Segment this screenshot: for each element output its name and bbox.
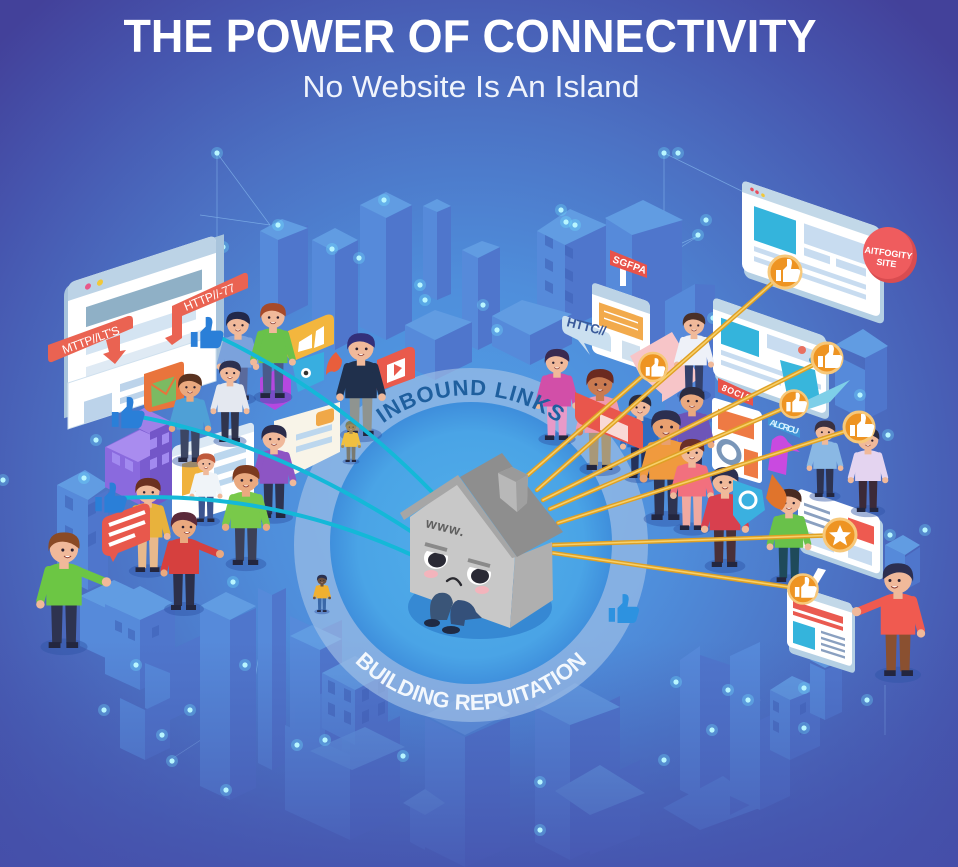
- glowing network nodes: [0, 147, 931, 836]
- person: jeans behind panel: [189, 453, 223, 526]
- magenta figure: [768, 435, 800, 475]
- authority site badge: [863, 227, 917, 283]
- pink bubble: [630, 332, 700, 402]
- browser panel: large left: [64, 232, 224, 430]
- cyan app icon: [292, 352, 324, 392]
- browser panel: mid left: [274, 402, 340, 481]
- red label: 8OCIA: [720, 383, 752, 403]
- red signboard: [575, 392, 643, 450]
- browser panel: top right: [742, 180, 884, 325]
- city bottom: [0, 535, 958, 867]
- chimney: [498, 467, 528, 512]
- HTTC bubble: [562, 314, 611, 355]
- browser panel: lower left: [172, 422, 254, 527]
- red link flag 2: [165, 273, 248, 345]
- people: right group: [535, 313, 925, 683]
- person: red hoodie woman: [160, 512, 224, 616]
- eyes: [423, 542, 492, 585]
- orange figure icon: [326, 352, 342, 375]
- badge 5: [844, 412, 874, 442]
- thumb 1: [191, 317, 224, 348]
- gold chat icon: [287, 315, 334, 360]
- person: orange man: [640, 410, 692, 527]
- person: purple jacket woman: [252, 425, 296, 524]
- red link flag 1: [48, 316, 133, 364]
- cyan box with flowers: [780, 346, 850, 412]
- legs: [424, 593, 482, 634]
- house roof: [400, 453, 563, 558]
- email icon: [144, 362, 184, 412]
- curved label: inbound links: INBOUND LINKS: [376, 380, 564, 422]
- thumb 3: [95, 482, 127, 513]
- blue thumbs left: [95, 317, 224, 513]
- authority site badge: AITFOGITY: [864, 245, 913, 261]
- browser panel: second right: [713, 297, 829, 421]
- curved label: building reputation: BUILDING REPUITATION: [356, 652, 586, 710]
- right bottom panel: [787, 583, 855, 674]
- sign post: [620, 262, 626, 286]
- person: man with signboard: [576, 369, 624, 476]
- inbound cyan links: [118, 335, 432, 555]
- cyan label: ALCRCU: [768, 417, 800, 436]
- badge 3: [812, 343, 842, 373]
- subtitle: No Website Is An Island: [302, 69, 640, 104]
- title: THE POWER OF CONNECTIVITY: [124, 10, 816, 62]
- red label: [718, 378, 753, 406]
- person: white shirt man: [210, 361, 250, 447]
- badge 7: [788, 574, 818, 604]
- blue thumb on ring: [609, 594, 639, 623]
- person: pink woman: [535, 349, 579, 446]
- frown: [447, 578, 461, 585]
- www label: www.: [423, 514, 467, 540]
- thumb 2: [112, 397, 145, 428]
- person: small sitting: [313, 575, 331, 614]
- orange bag: [766, 474, 787, 510]
- person: green man far left: [36, 532, 111, 655]
- video icon: [376, 347, 415, 396]
- house shadow: [408, 575, 552, 639]
- person: pink dress girl: [670, 439, 714, 536]
- cyan shield icon: [733, 480, 765, 527]
- outbound gold links: [528, 272, 859, 589]
- badge 4: [780, 390, 808, 418]
- person: blue shirt man: [169, 374, 211, 467]
- authority site badge: SITE: [876, 257, 897, 269]
- sign: SGFPA: SGFPA: [611, 254, 648, 277]
- person: yellow dress woman: [125, 478, 171, 578]
- badge 2: [769, 256, 801, 288]
- person: green woman: [767, 489, 811, 588]
- person: dark hair rear: [217, 312, 259, 405]
- house with sad face: [400, 453, 563, 634]
- person: purple rear: [670, 387, 714, 486]
- person: vest man: [336, 333, 386, 442]
- city skyline top: [260, 192, 888, 430]
- right lower panel: star: [798, 488, 883, 581]
- person: green woman: [250, 303, 296, 404]
- people: left group: [36, 303, 386, 655]
- person: green and red man: [222, 465, 270, 571]
- browser panel: small top centre: [592, 282, 650, 372]
- person: red man: [701, 467, 749, 573]
- purple building: [105, 408, 172, 509]
- HTTC bubble: HTTC//: [565, 314, 608, 339]
- red chat bubble: [102, 504, 150, 562]
- person: red shirt man: [852, 563, 925, 683]
- red link flag 1: MTTP//LT'S: [60, 323, 121, 357]
- city left: [57, 470, 144, 660]
- connector between panels: [808, 568, 826, 590]
- person: blue grey man: [807, 421, 843, 502]
- panel with orange cards: [712, 397, 762, 484]
- network lines: [170, 153, 885, 820]
- person: blue rear: [620, 395, 660, 483]
- person: purple white woman: [848, 428, 888, 517]
- badge 6: star: [824, 519, 856, 551]
- house walls: [410, 483, 553, 628]
- person: striped woman: [674, 313, 714, 401]
- badge 1: [639, 353, 667, 381]
- ring: building reputation platform: [294, 368, 648, 722]
- person: small standing: [341, 421, 361, 465]
- purple app icon: [260, 370, 291, 410]
- cheeks: [424, 570, 489, 594]
- gold link badges: [639, 256, 874, 604]
- red link flag 2: HTTP//-77: [182, 280, 237, 314]
